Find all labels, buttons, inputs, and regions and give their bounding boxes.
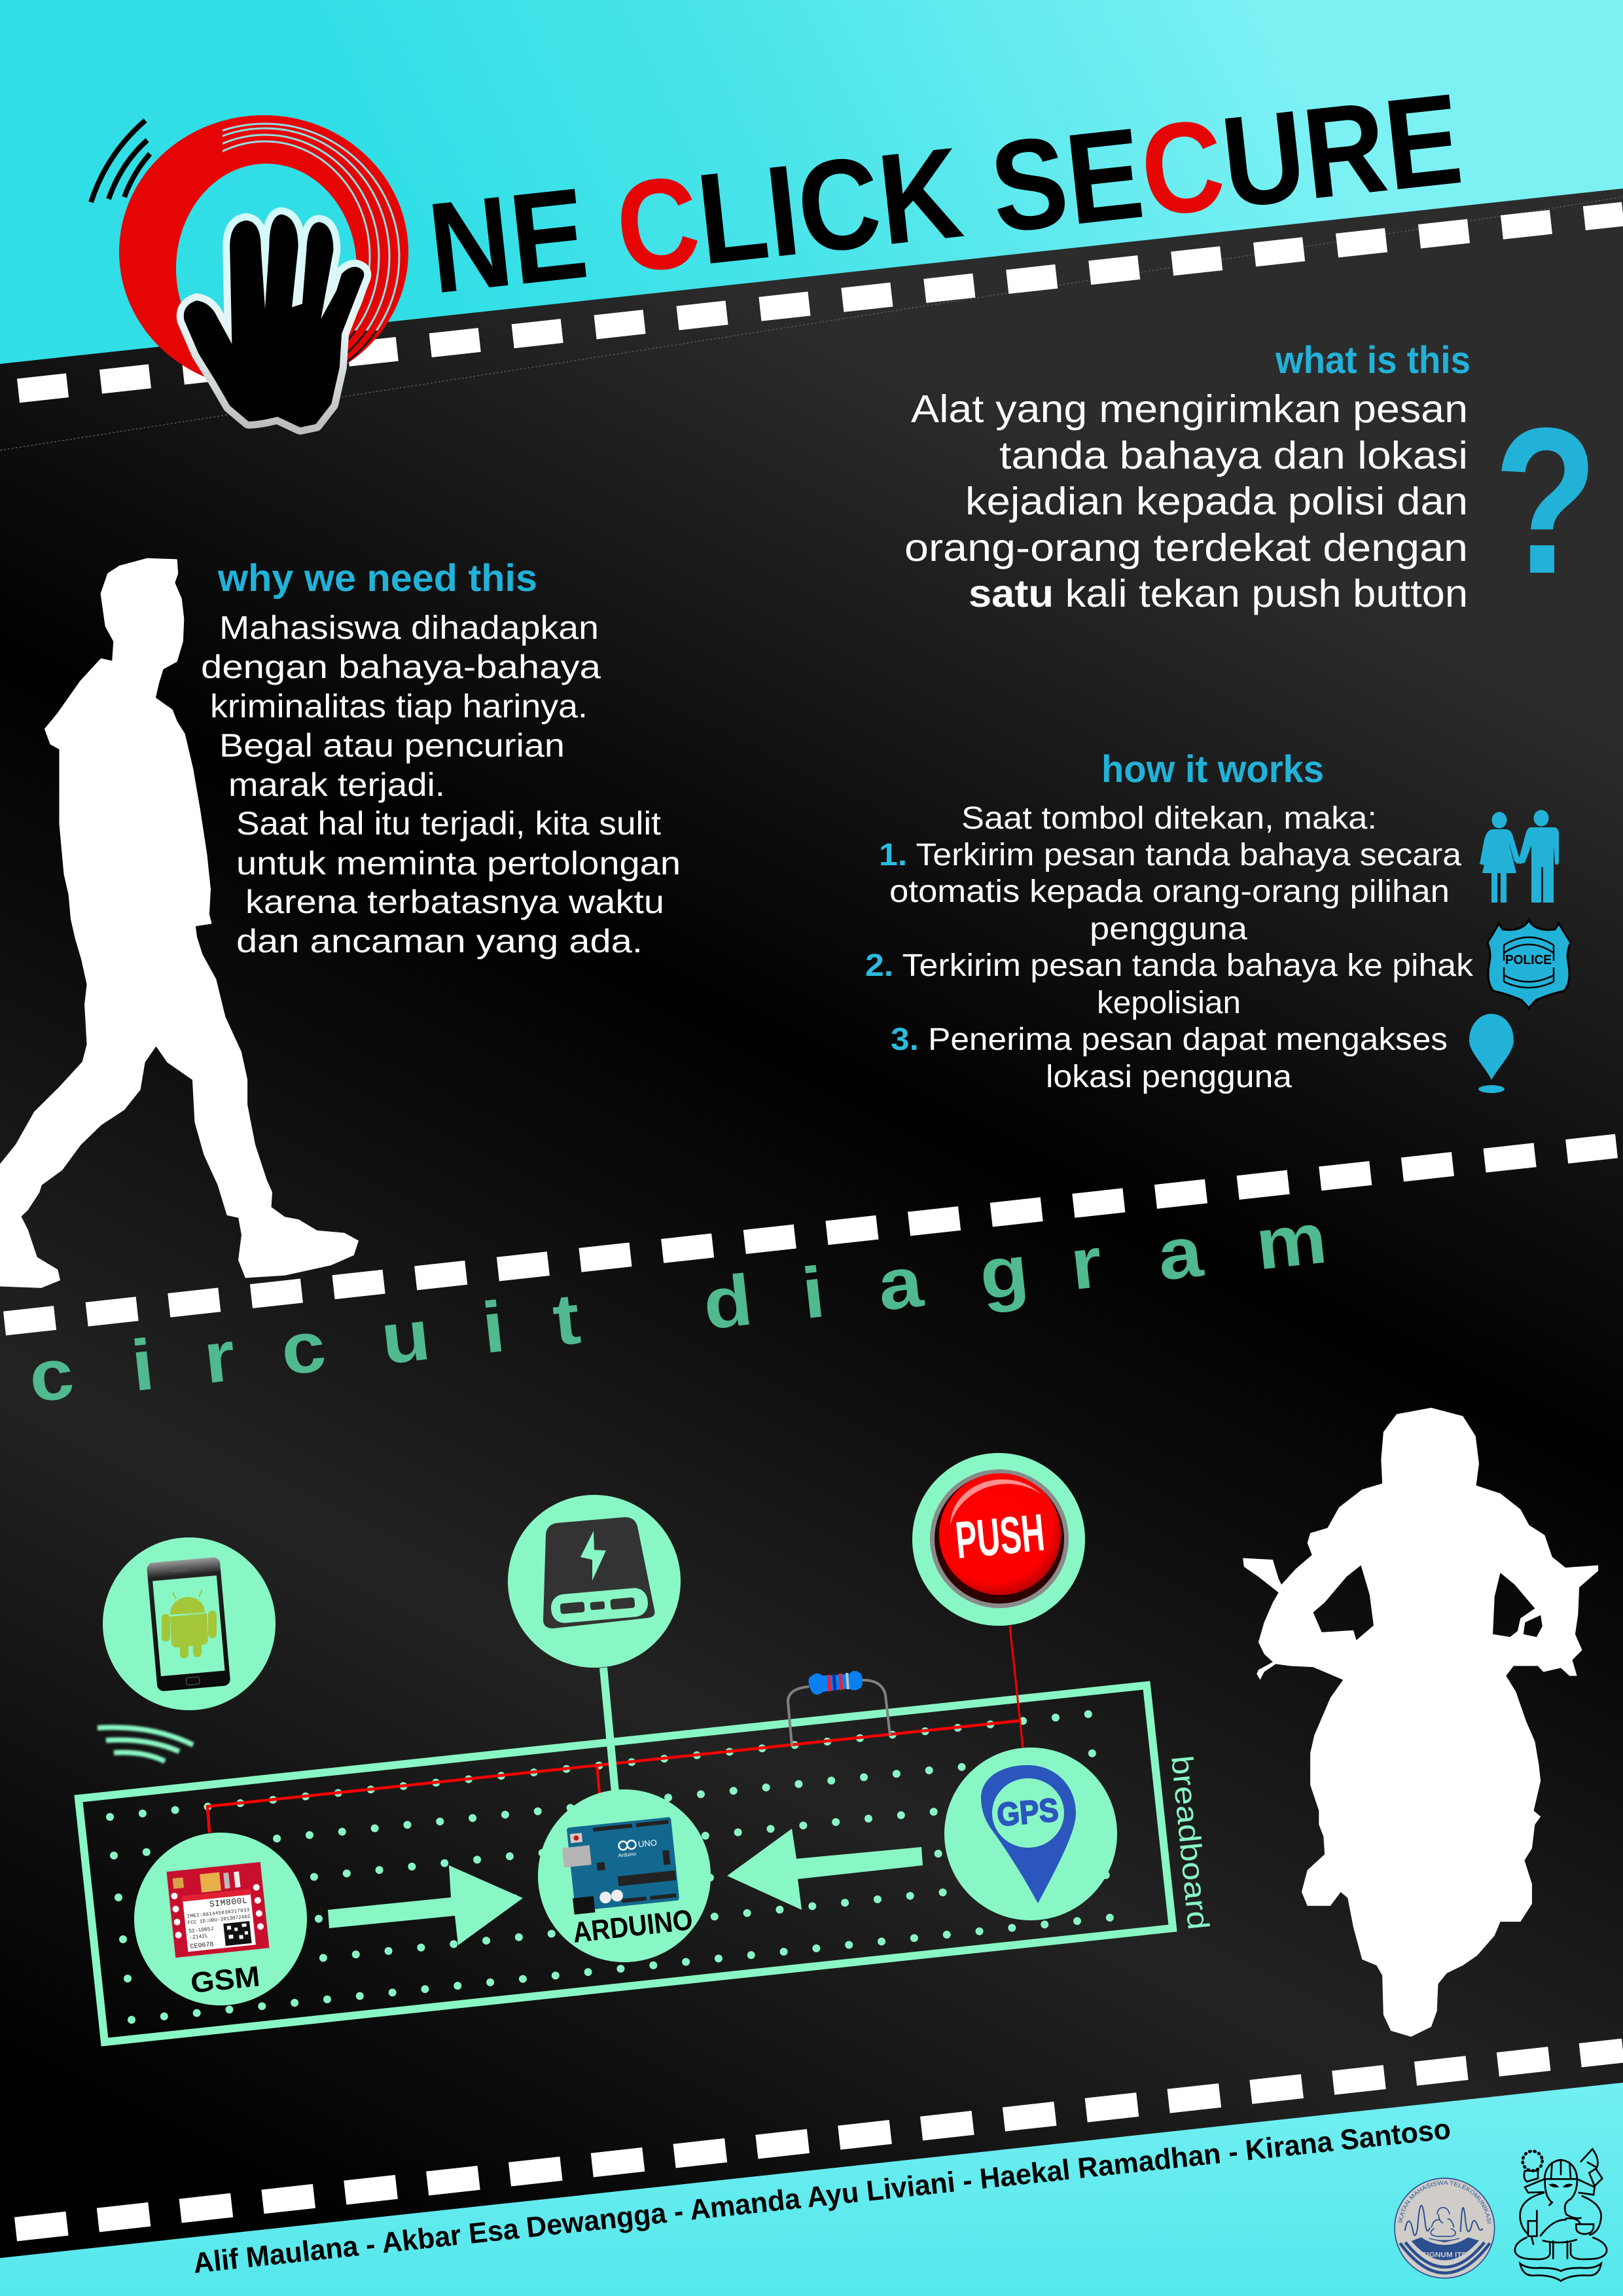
top film strip holes xyxy=(18,214,1623,391)
paragraph: how it works steps: kepolisian xyxy=(1097,986,1241,1020)
Arduino Uno board: UNO xyxy=(637,1837,657,1849)
paragraph: what is this: tanda bahaya dan lokasi xyxy=(999,434,1468,477)
hand silhouette xyxy=(184,215,364,427)
paragraph: why we need this: kriminalitas tiap harinya. xyxy=(210,688,588,725)
power bank body xyxy=(543,1517,655,1628)
lotus base xyxy=(1520,2263,1601,2281)
signal arcs xyxy=(91,120,150,202)
wires xyxy=(207,1626,1023,1833)
paragraph: why we need this: untuk meminta pertolongan xyxy=(236,845,681,882)
bottom cyan band xyxy=(0,2083,1623,2296)
raised arms xyxy=(1524,2149,1602,2186)
heading: what is this: what is this xyxy=(1275,339,1471,382)
SIM800L board: S2-1065J xyxy=(188,1926,214,1935)
lightning bolt xyxy=(580,1531,606,1581)
silhouette: motorcycle rider xyxy=(1243,1408,1598,2037)
Arduino label: ARDUINO xyxy=(571,1904,694,1949)
paragraph: how it works steps: pengguna xyxy=(1090,912,1247,946)
logo: red ring and hand xyxy=(91,115,408,427)
heading: how it works: how it works xyxy=(1101,748,1324,791)
paragraph: why we need this: dan ancaman yang ada. xyxy=(236,923,643,960)
paragraph: what is this: satu kali tekan push button xyxy=(969,572,1468,615)
SIM800L board: SIM800L xyxy=(209,1895,248,1909)
paragraph: how it works steps: 2. Terkirim pesan tanda bahaya ke pihak xyxy=(865,948,1474,983)
phone body xyxy=(147,1557,231,1692)
logo: ITB Ganesha xyxy=(1515,2149,1607,2281)
ears xyxy=(1525,2179,1595,2195)
paragraph: how it works steps: 1. Terkirim pesan tanda bahaya secara xyxy=(879,838,1461,872)
arrow: GPS to Arduino xyxy=(727,1829,923,1910)
crossed legs xyxy=(1515,2237,1607,2259)
circuit: breadboard xyxy=(79,1685,1216,2042)
top cyan band xyxy=(0,0,1623,364)
icon: couple xyxy=(1480,810,1559,903)
arrow: GSM to Arduino xyxy=(328,1865,523,1945)
paragraph: what is this: orang-orang terdekat dengan xyxy=(904,526,1468,569)
icon: location pin xyxy=(1469,1014,1514,1093)
icon: police badge: POLICE xyxy=(1505,953,1552,967)
paragraph: why we need this: Begal atau pencurian xyxy=(219,727,565,764)
credits: Alif Maulana - Akbar Esa Dewangga - Amanda Ayu Liviani - Haekal Ramadhan - Kirana Santoso xyxy=(192,2113,1452,2280)
paragraph: how it works steps: otomatis kepada orang-orang pilihan xyxy=(889,874,1450,909)
paragraph: what is this: kejadian kepada polisi dan xyxy=(965,480,1468,523)
logo: Signum ITB xyxy=(1394,2178,1495,2279)
small ganesha xyxy=(1431,2208,1455,2236)
icon: question mark: ? xyxy=(1493,384,1598,617)
title: NE CLICK SECURE xyxy=(422,66,1468,321)
Signum text: SIGNUM ITB xyxy=(1422,2251,1467,2259)
blue arcs xyxy=(1412,2237,1479,2260)
paragraph: how it works steps: lokasi pengguna xyxy=(1046,1060,1292,1094)
SIM800L board: -Z142L xyxy=(189,1933,209,1941)
crown and head xyxy=(1544,2160,1577,2179)
member text on arc: IKATAN MAHASISWA TELEKOMUNIKASI xyxy=(1398,2181,1491,2223)
SIM800L board xyxy=(166,1862,270,1958)
bottom film strip holes xyxy=(16,2051,1623,2229)
middle film strip holes xyxy=(5,1146,1616,1323)
icon: wireless signal xyxy=(98,1727,193,1761)
node: push button: PUSH xyxy=(953,1503,1047,1570)
paragraph: what is this xyxy=(904,387,1468,615)
paragraph: why we need this: dengan bahaya-bahaya xyxy=(201,649,601,685)
SIM800L board: IMEI:861445030317033 xyxy=(187,1908,250,1920)
node: GPS: GPS xyxy=(995,1791,1060,1833)
Arduino Uno board xyxy=(560,1817,680,1915)
body xyxy=(1520,2193,1601,2235)
paragraph: how it works steps: 3. Penerima pesan dapat mengakses xyxy=(891,1022,1448,1057)
node: GPS xyxy=(944,1748,1117,1920)
indicator pill xyxy=(550,1587,649,1624)
QR code xyxy=(223,1921,252,1946)
GSM label: GSM xyxy=(189,1960,261,2000)
SIM800L board: CE0678 xyxy=(190,1941,214,1951)
paragraph: how it works steps: Saat tombol ditekan, maka: xyxy=(961,801,1377,836)
paragraph: how it works steps xyxy=(865,801,1474,1094)
SIM800L board: FCC ID:UDU-2013072482 xyxy=(188,1914,251,1926)
node: Arduino xyxy=(538,1789,711,1962)
paragraph: why we need this: Saat hal itu terjadi, kita sulit xyxy=(236,805,661,842)
paragraph: why we need this: Mahasiswa dihadapkan xyxy=(219,609,599,646)
breadboard dots xyxy=(110,1711,1141,2020)
signal wave xyxy=(1405,2206,1483,2235)
icon: resistor xyxy=(788,1671,890,1746)
GPS pin xyxy=(981,1765,1076,1903)
breadboard label: breadboard xyxy=(1165,1754,1216,1931)
heading: circuit diagram: circuitdiagram xyxy=(25,1197,1330,1418)
Arduino Uno board: Arduino xyxy=(618,1851,637,1859)
paragraph: what is this: Alat yang mengirimkan pesan xyxy=(911,387,1468,431)
icon: police badge xyxy=(1488,920,1571,1008)
silhouette: walking man xyxy=(0,559,358,1287)
android robot xyxy=(162,1590,217,1659)
red swirl ring xyxy=(119,115,408,389)
paragraph: why we need this xyxy=(201,609,681,960)
node: push button xyxy=(912,1453,1085,1626)
node: power bank xyxy=(508,1495,681,1668)
paragraph: why we need this: karena terbatasnya waktu xyxy=(245,884,664,920)
heading: why we need this: why we need this xyxy=(217,557,537,600)
node: phone xyxy=(103,1537,276,1710)
paragraph: why we need this: marak terjadi. xyxy=(228,766,445,803)
breadboard frame xyxy=(79,1685,1173,2042)
node: GSM module xyxy=(134,1833,307,2005)
